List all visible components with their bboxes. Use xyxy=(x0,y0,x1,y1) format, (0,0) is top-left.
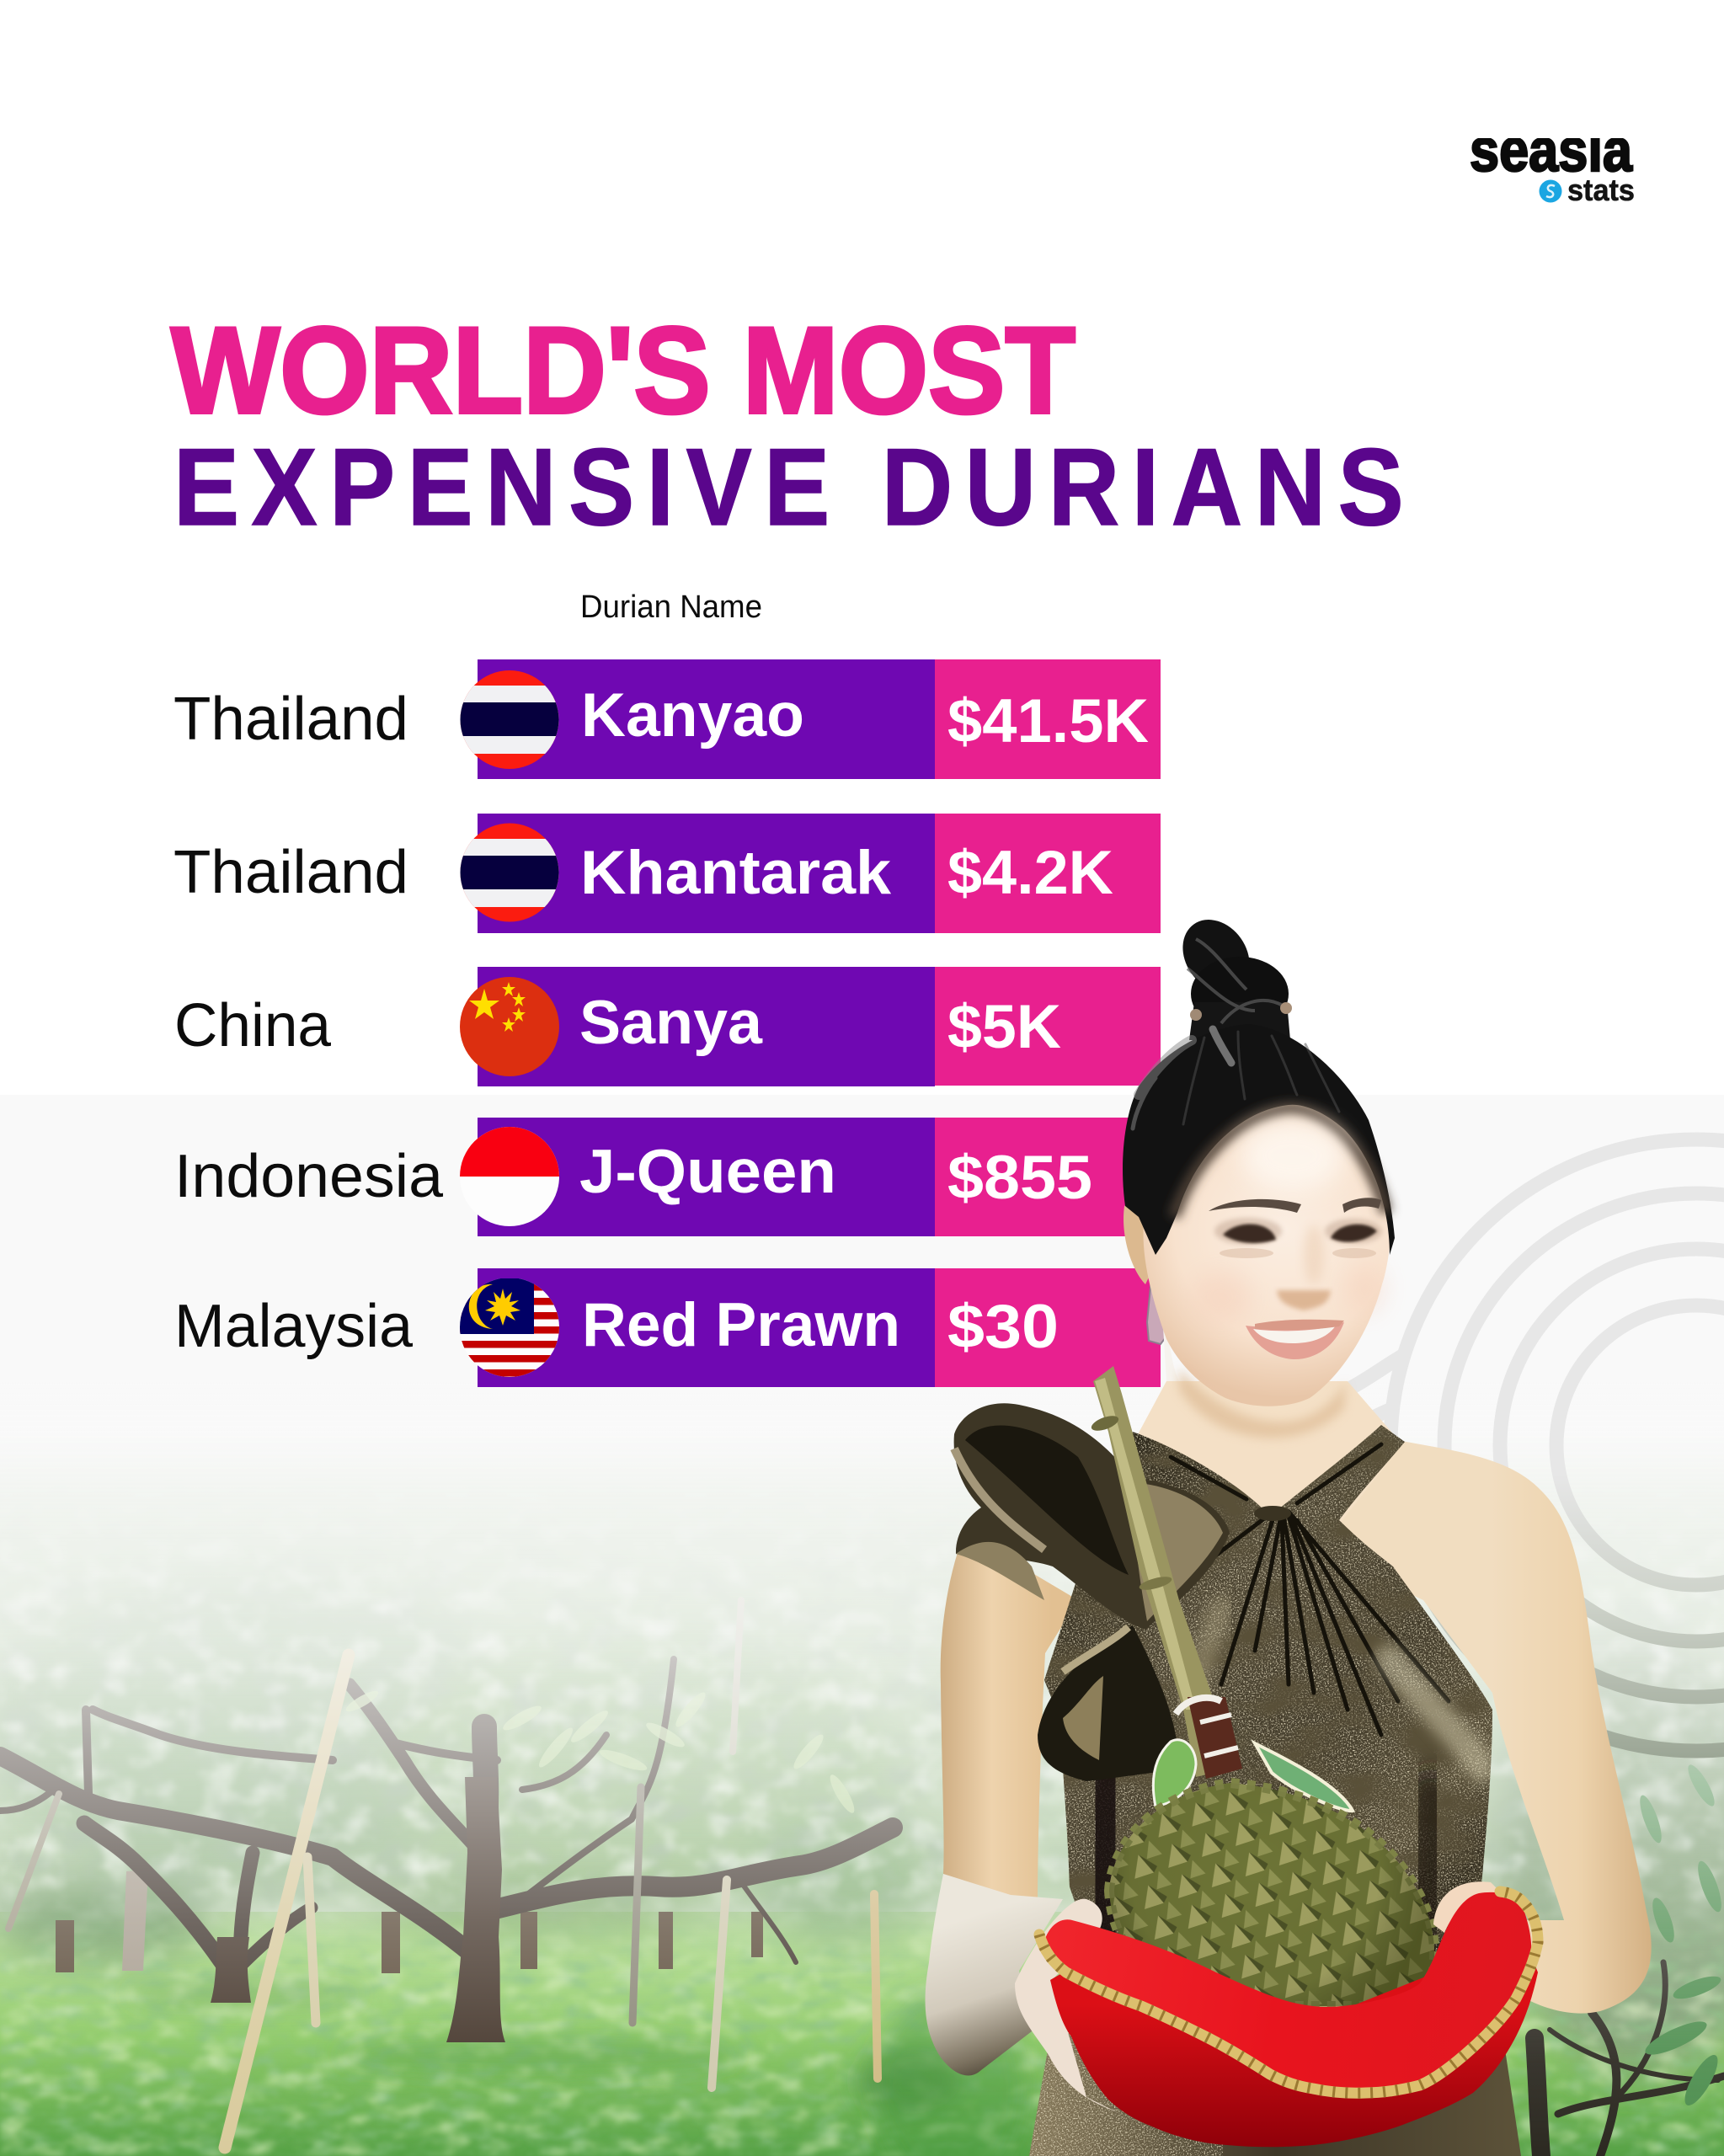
left forearm xyxy=(926,1874,1063,2075)
bun xyxy=(1169,907,1292,1040)
knot xyxy=(1254,1506,1291,1521)
face xyxy=(1143,1102,1391,1406)
column heading: durian name: Durian Name xyxy=(580,590,762,625)
skirt glitter xyxy=(1029,2021,1223,2156)
ground shadows and clover xyxy=(126,1983,1027,2156)
right side tree and leaves xyxy=(1535,1762,1724,2156)
flag: Indonesia xyxy=(460,1127,559,1226)
right arm and shoulder xyxy=(1166,1381,1652,2014)
left arm xyxy=(941,1533,1078,1905)
smile xyxy=(1246,1320,1344,1359)
right hand xyxy=(1433,1881,1503,1933)
title: EXPENSIVE DURIANS xyxy=(173,426,1404,548)
row: China Sanya xyxy=(174,967,1161,1086)
bamboo poles xyxy=(8,1600,878,2148)
logo: seasia stats: stats xyxy=(1567,173,1635,207)
main trunks xyxy=(211,1777,505,2042)
left hand xyxy=(1015,1899,1120,2114)
flag: Malaysia xyxy=(460,1278,559,1378)
hairline softness xyxy=(1174,1108,1386,1217)
row: Indonesia J-Queen: Indonesia xyxy=(174,1143,444,1210)
title xyxy=(171,302,1404,548)
back trunks xyxy=(56,1870,763,1973)
earring xyxy=(1147,1278,1166,1344)
hair highlights xyxy=(1133,1029,1339,1129)
row: Thailand Khantarak: Khantarak xyxy=(580,839,891,907)
durian fruit xyxy=(1109,1783,1434,2006)
row: China Sanya: Sanya xyxy=(579,989,763,1057)
row: Malaysia Red Prawn: $30 xyxy=(947,1293,1059,1361)
soft neck shadow xyxy=(1179,1369,1346,1438)
row: Malaysia Red Prawn: Malaysia xyxy=(174,1293,414,1360)
row: Indonesia J-Queen: $855 xyxy=(947,1144,1092,1212)
row: Thailand Khantarak: Thailand xyxy=(173,839,408,906)
row: Thailand Kanyao: $41.5K xyxy=(947,687,1149,755)
hair xyxy=(1123,1024,1395,1255)
decorative concentric rings xyxy=(1348,1139,1724,1751)
skirt xyxy=(1029,2021,1521,2156)
cheeks xyxy=(1192,1265,1383,1322)
bamboo stem xyxy=(1090,1366,1231,1777)
eyes xyxy=(1214,1218,1382,1258)
shoulder ruffle xyxy=(954,1403,1230,1630)
row: Thailand Kanyao: Thailand xyxy=(173,686,408,753)
gold rope xyxy=(1039,1892,1538,2093)
fog overlay xyxy=(0,1381,1724,2156)
row: Thailand Khantarak xyxy=(173,814,1161,933)
forehead highlight xyxy=(1241,1120,1345,1191)
flag: China xyxy=(460,977,559,1076)
stem ties and labels xyxy=(1153,1697,1353,1811)
eyebrows xyxy=(1209,1198,1381,1213)
row: China Sanya: $5K xyxy=(947,993,1061,1061)
logo: seasia stats: seasia xyxy=(1470,117,1633,184)
row: Indonesia J-Queen xyxy=(174,1118,1161,1236)
ear xyxy=(1124,1204,1156,1284)
dress glitter and folds xyxy=(1044,1423,1499,1962)
side pocket ruffle xyxy=(1038,1625,1179,1781)
row: Thailand Kanyao: Kanyao xyxy=(581,681,804,750)
row: Malaysia Red Prawn xyxy=(174,1268,1161,1387)
woman holding durian xyxy=(926,907,1652,2156)
foliage texture xyxy=(2,1579,1724,1925)
flag: Thailand xyxy=(460,670,559,770)
row: Indonesia J-Queen: J-Queen xyxy=(579,1138,836,1206)
upper chest xyxy=(1137,1381,1402,1524)
row: Thailand Kanyao xyxy=(173,659,1161,779)
grass texture xyxy=(0,1908,1724,2156)
shadow behind ear xyxy=(1162,1314,1179,1381)
nose xyxy=(1277,1225,1331,1310)
flag: Thailand xyxy=(460,823,559,922)
red pillow xyxy=(1039,1892,1538,2147)
row: Thailand Khantarak: $4.2K xyxy=(947,839,1113,907)
logo icon xyxy=(1540,180,1561,202)
grass xyxy=(0,1912,1724,2156)
row: China Sanya: China xyxy=(174,992,332,1059)
background photo: durian orchard xyxy=(0,1457,1724,2156)
row: Malaysia Red Prawn: Red Prawn xyxy=(582,1291,900,1359)
title: WORLD'S MOST xyxy=(171,302,1075,439)
logo: seasia stats xyxy=(1465,109,1638,207)
foliage haze xyxy=(0,1457,1724,2072)
tree branches xyxy=(0,1659,893,1971)
light leaf clusters xyxy=(344,1688,858,1816)
dress bodice xyxy=(1044,1425,1492,1962)
